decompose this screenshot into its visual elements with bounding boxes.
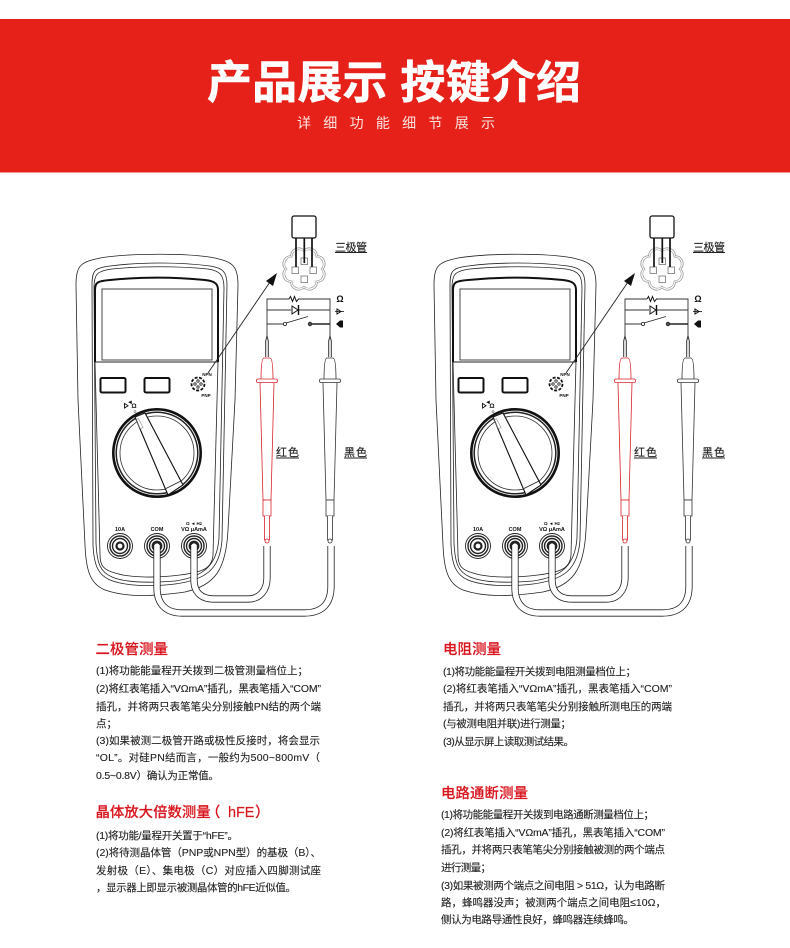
panel: diode measurement (96, 640, 322, 782)
body text: (1)将功能能量程开关拨到电路通断测量档位上； (441, 808, 654, 821)
circuit schematic (267, 296, 330, 338)
dial symbols (482, 400, 495, 412)
body text: 0.5~0.8V）确认为正常值。 (96, 769, 219, 782)
body text: 插孔，并将两只表笔笔尖分别接触PN结的两个端 (96, 700, 322, 713)
body text (441, 808, 666, 926)
input jacks (466, 534, 564, 558)
red probe (614, 336, 636, 543)
heading: 晶体放大倍数测量（hFE）: ） (255, 804, 269, 821)
heading: 晶体放大倍数测量（hFE）: 晶体放大倍数测量 (96, 805, 211, 821)
body text: 点； (96, 718, 117, 730)
jack labels: 10A (473, 527, 483, 533)
body text: 插孔，并将两只表笔笔尖分别接触被测的两个端点 (441, 843, 665, 856)
buttons (100, 378, 170, 392)
panel: left multimeter diagram (76, 216, 367, 613)
dial symbols: Ω (489, 403, 495, 410)
jack labels (115, 521, 207, 533)
rotary dial (471, 409, 559, 497)
label: 三极管: 三极管 (335, 240, 367, 254)
circuit symbols (693, 294, 702, 328)
arrow to transistor (208, 273, 277, 373)
transistor (283, 216, 325, 290)
jack labels (473, 521, 565, 533)
body text: 侧认为电路导通性良好，蜂鸣器连续蜂鸣。 (441, 913, 634, 926)
body text: (3)如果被测二极管开路或极性反接时，将会显示 (96, 734, 320, 747)
body text: 插孔，并将两只表笔笔尖分别接触所测电压的两端 (443, 700, 672, 713)
subtitle: 详细功能细节展示 (297, 115, 495, 131)
hFE socket (550, 372, 570, 398)
body text (96, 664, 322, 782)
circuit schematic (625, 296, 688, 338)
body text: (与被测电阻并联)进行测量； (443, 717, 571, 730)
body text: (2)将红表笔插入“VΩmA”插孔，黑表笔插入“COM” (441, 826, 666, 839)
hFE socket: NPN (202, 372, 212, 377)
label: 三极管: 三极管 (693, 240, 725, 254)
dial symbols: Ω (131, 403, 137, 410)
panel: resistance measurement (443, 641, 672, 748)
body text: (1)将功能能量程开关拨到电阻测量档位上； (443, 665, 636, 678)
hFE socket: PNP (201, 393, 211, 398)
panel: hFE measurement (96, 803, 321, 894)
header banner (0, 19, 790, 172)
body text: (2)将待测晶体管（PNP或NPN型）的基极（B）、 (96, 846, 321, 859)
hFE socket (192, 372, 212, 398)
jack labels: COM (509, 527, 522, 533)
arrow to transistor (566, 273, 635, 373)
dial symbols (124, 400, 137, 412)
label: 黑色: 黑色 (702, 445, 725, 459)
circuit symbols: Ω (694, 294, 702, 304)
jack labels: 10A (115, 527, 125, 533)
circuit symbols (335, 294, 344, 328)
display screen (102, 289, 212, 360)
body text: (1)将功能能量程开关拨到二极管测量档位上； (96, 664, 308, 677)
hFE socket: NPN (560, 372, 570, 377)
body text: (2)将红表笔插入“VΩmA”插孔，黑表笔插入“COM” (96, 682, 322, 695)
label: 黑色: 黑色 (344, 445, 367, 459)
rotary dial (113, 409, 201, 497)
body text (96, 829, 321, 894)
test leads (515, 545, 689, 613)
red probe (256, 336, 278, 543)
body text: ，显示器上即显示被测晶体管的hFE近似值。 (96, 881, 296, 894)
body text: 路，蜂鸣器没声；被测两个端点之间电阻≤10Ω， (441, 896, 666, 909)
meter body (434, 254, 596, 596)
body text: (1)将功能/量程开关置于“hFE”。 (96, 829, 238, 842)
black probe (320, 336, 340, 543)
panel: continuity measurement (441, 785, 666, 926)
body text: (3)如果被测两个端点之间电阻 > 51Ω，认为电路断 (441, 879, 666, 892)
body text: 进行测量； (441, 861, 491, 874)
panel: right multimeter diagram (434, 216, 725, 613)
body text: (2)将红表笔插入“VΩmA”插孔，黑表笔插入“COM” (443, 682, 672, 695)
body text: “OL”。对硅PN结而言，一般约为500~800mV（ (96, 751, 320, 764)
jack labels: Ω ◄ Hz (186, 521, 203, 526)
jack labels: COM (151, 527, 164, 533)
label: 红色: 红色 (276, 445, 299, 459)
dial symbols: ◄ (127, 400, 133, 406)
body text (443, 665, 672, 748)
heading: 晶体放大倍数测量（hFE）: （ (206, 804, 220, 821)
jack labels: Ω ◄ Hz (544, 521, 561, 526)
transistor (641, 216, 683, 290)
label: 红色: 红色 (634, 445, 657, 459)
heading: 晶体放大倍数测量（hFE）: hFE (228, 805, 254, 821)
body text: (3)从显示屏上读取测试结果。 (443, 735, 574, 748)
test leads (157, 545, 331, 613)
title: 产品展示 按键介绍 (207, 57, 581, 108)
heading: 二极管测量: 二极管测量 (96, 640, 168, 658)
heading: 电路通断测量: 电路通断测量 (441, 785, 528, 802)
body text: 发射极（E）、集电极（C）对应插入四脚测试座 (96, 864, 321, 877)
jack labels: VΩ μAmA (181, 527, 207, 533)
input jacks (108, 534, 206, 558)
display screen (460, 289, 570, 360)
heading: 电阻测量: 电阻测量 (443, 641, 501, 658)
meter body (76, 254, 238, 596)
buttons (458, 378, 528, 392)
jack labels: VΩ μAmA (539, 527, 565, 533)
hFE socket: PNP (559, 393, 569, 398)
black probe (678, 336, 698, 543)
circuit symbols: Ω (336, 294, 344, 304)
dial symbols: ◄ (485, 400, 491, 406)
